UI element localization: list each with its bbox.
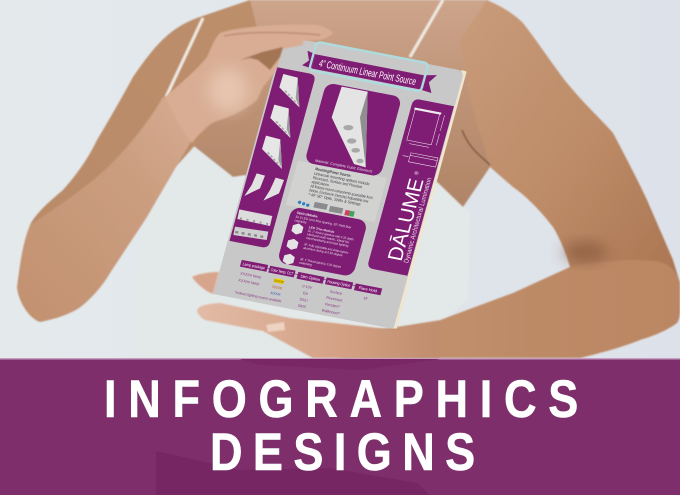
right dress strap: [410, 0, 443, 57]
right forearm: [300, 260, 680, 358]
optics text 3: switching: [299, 261, 313, 267]
optics text 1: LED Trim Module: [308, 225, 335, 234]
housing values: Pendant*: [325, 302, 341, 309]
color temp values: [270, 278, 285, 297]
left forearm: [17, 97, 215, 322]
upper hand: [165, 25, 333, 143]
optics panel: [277, 206, 368, 277]
registered mark: ®: [413, 171, 421, 176]
brand name: DĀLUME: [384, 177, 429, 263]
mounting text block: Mounting/Power Source:: [315, 166, 352, 178]
title ribbon: [301, 50, 437, 93]
fixture 5: [263, 178, 284, 201]
optics text 2: 5F: Fully adjustable and deep regress: [304, 242, 349, 255]
clipboard card: [213, 35, 467, 329]
center product panel: [304, 82, 402, 177]
header: lamp package: Lamp package: [242, 261, 266, 270]
fixture 3: [262, 136, 282, 169]
mounting text block: Universal mounting options include: [313, 171, 371, 186]
dress: [132, 145, 470, 358]
color temp values: 3500K: [271, 285, 283, 291]
footnote: *Indirect lighting source available: [234, 291, 282, 303]
headlines: [104, 370, 578, 482]
gap between fingers: [240, 47, 283, 70]
color temp values: 4000K: [270, 291, 282, 297]
optics text 1: [305, 225, 355, 249]
card edge: [392, 70, 467, 329]
center panel caption: Material: Complete Cubic Elements: [315, 159, 373, 174]
lamp values: XXX/nr lamp: [240, 272, 262, 279]
housing values: Recessed: [326, 296, 343, 303]
photo: woman holding the card: [17, 0, 680, 358]
optics panel: capacity: [294, 218, 307, 225]
photo background: [0, 0, 680, 360]
housing values: Surface: [329, 290, 343, 296]
fixture 1: [279, 74, 299, 107]
mounting text block: below. Enclosure (remote) Adjustable low: [309, 187, 369, 204]
left panel: [229, 67, 316, 248]
housing values: [321, 289, 346, 316]
fingertip: [192, 272, 219, 294]
dim values: DMX: [297, 304, 307, 309]
housing values: Wallmount*: [321, 308, 341, 316]
dimension drawing: front: [405, 108, 445, 149]
fixture strip 1: [237, 209, 272, 226]
mounting text block: Recessed, Surface and Pendant: [312, 175, 363, 189]
mounting text block: All fixtures mount components accessible from: [310, 183, 374, 200]
finger line: [224, 32, 320, 36]
connector line: [241, 263, 382, 291]
header: housing option: Housing Option: [327, 279, 351, 288]
lamp values: [238, 272, 262, 286]
thumbnail: [266, 322, 285, 332]
pale central area: [286, 161, 387, 222]
brand tagline: Dynamic Architectural Lumination: [403, 177, 433, 264]
optics icon 3: [282, 253, 296, 266]
header: color temp: [268, 266, 296, 277]
dim values: DALI: [299, 297, 308, 303]
card body: [213, 36, 464, 329]
torso skin: [190, 0, 520, 207]
left upper arm: [30, 0, 260, 240]
color temp values: 3000K: [273, 279, 285, 285]
palm highlight: [208, 68, 248, 112]
optics icon 1: [291, 223, 304, 235]
left dress strap: [166, 18, 203, 97]
header: dim option: Dim Option: [300, 273, 321, 282]
elbow crease shadow: [563, 242, 607, 262]
mounting text block: *-40° 90° Optic, Shifts & Settings: [308, 192, 361, 207]
header: flare hold: Flare Hold: [358, 285, 378, 293]
optics text 1: 5k: 1" Round aperture with 0.25 depth: [307, 229, 354, 242]
optics text 2: aluminum diving at 0.50 degree: [303, 246, 343, 257]
flare value: 1ft: [363, 296, 368, 301]
dim values: 0-10V: [302, 284, 313, 290]
certification icons: [297, 199, 355, 217]
mounting text block: [308, 166, 379, 209]
armpit shadow: [462, 130, 490, 165]
fixture strip 2: [233, 227, 268, 240]
header: flare hold: [354, 283, 382, 295]
large product fixture: [332, 87, 368, 167]
optics icon 2: [286, 238, 299, 251]
right upper arm: [460, 0, 680, 300]
optics text 1: merchandising and task lighting: [305, 236, 349, 248]
dim values: Elv: [302, 291, 309, 296]
optics text 3: 3K: 1" Round glanted, 0.25 degree: [300, 257, 342, 269]
dimension drawing: side: [401, 151, 438, 167]
header: dim option: [297, 272, 324, 284]
translucent dress shade: [156, 451, 430, 495]
lower hand: [192, 272, 440, 358]
optics text 1: Vertical wall-wash, ideal for: [306, 232, 350, 244]
clip band: [309, 42, 429, 92]
ribbon title: 4" Continuum Linear Point Source: [318, 59, 417, 88]
headline line two: DESIGNS: [210, 423, 475, 482]
optics intro: 5X 9 LED Lens Max spacing, 30° Field Max: [295, 215, 352, 230]
header: color temp: Color Temp. CCT: [270, 267, 294, 276]
headline line one: INFOGRAPHICS: [104, 370, 578, 429]
bottom banner: [0, 358, 680, 495]
right brand panel: [367, 98, 454, 276]
thumb and palm: [197, 303, 440, 358]
mounting text block: applications.: [311, 179, 330, 187]
fixture 4: [244, 173, 265, 196]
fixture 2: [270, 105, 290, 138]
dim values: [297, 284, 313, 309]
lamp values: XXX/nr lamp: [238, 278, 260, 286]
optics heading: Optics/Media:: [296, 211, 319, 219]
spec table: [232, 260, 383, 322]
